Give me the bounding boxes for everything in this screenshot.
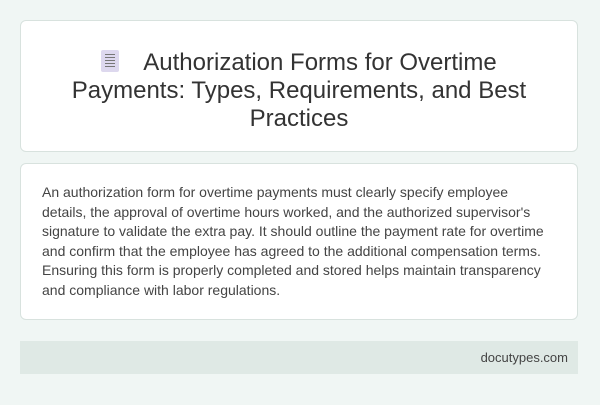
panel: description: [20, 163, 578, 320]
footer: [20, 341, 578, 374]
icon: document: [101, 50, 119, 72]
text block: An authorization form for overtime payments must clearly specify employee details, the approval of overtime hours worked, and the authorized supervisor's signature to validate the extra pay. It should outline the payment rate for overtime and confirm that the employee has agreed to the additional compensation terms. Ensuring this form is properly completed and stored helps maintain transparency and compliance with labor regulations.: [42, 184, 544, 298]
title: Authorization Forms for Overtime Payments: Types, Requirements, and Best Practices: [72, 49, 526, 132]
footer text: docutypes.com: [481, 350, 568, 365]
panel: title card: [20, 20, 578, 152]
